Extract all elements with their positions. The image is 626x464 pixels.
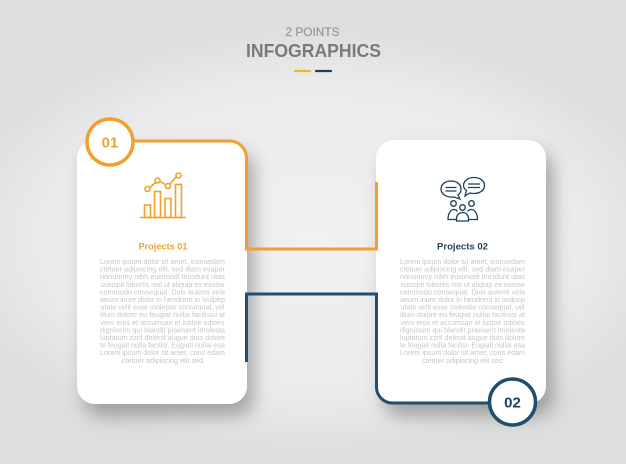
text block: card 1 body: Lorem ipsum dolor sit amet, iconsedam [100, 259, 225, 266]
text block: card 2 body: luptatum zzril delenit augue duis dolore [400, 335, 525, 342]
text block: card 2 body: suscipit lobortis nisl ut aliquip ex easow [400, 282, 525, 289]
text block: card 1 body: suscipit lobortis nisl ut aliquip ex easow [100, 282, 225, 289]
text block: card 2 body: te feugait nulla facilisi. Eugiati nullai esa [400, 343, 525, 350]
text block: card 2 body: illum dolore eu feugiat nullai facilisisi at [400, 312, 525, 319]
badge 02: 02 [504, 394, 521, 412]
text block: card 1 body: dignissim qui blandit praesent imolesta [100, 327, 225, 334]
text block: card 2 body: ctetuer adipiscing elit sed [422, 358, 503, 365]
text block: card 2 body: ctetuer adipiscing elit, sed diam esaper [400, 267, 526, 274]
title accent dashes [295, 70, 331, 72]
text block: card 1 body: Lorem ipsum dolor sit amet, cons edam [100, 350, 225, 357]
blue connector line [246, 294, 492, 403]
text block: card 1 body: illum dolore eu feugiat nullai facilisisi at [100, 312, 225, 319]
text block: card 1 body: commodo consequat. Duis autemi vela [100, 289, 225, 296]
text block: card 1 body: te feugait nulla facilisi. Eugiati nullai esa [100, 343, 225, 350]
title: 2 POINTS [286, 25, 340, 39]
title [246, 25, 381, 61]
text block: card 2 body: aeum iriure dolor in hendrerit in ivulpep [400, 297, 525, 304]
text block: card 2 body: commodo consequat. Duis autemi vela [400, 289, 525, 296]
text block: card 2 body: Lorem ipsum dolor sit amet, cons edam [400, 350, 525, 357]
title: INFOGRAPHICS [246, 41, 381, 61]
text block: card 1 body [100, 259, 226, 365]
panel: card 2 [376, 140, 546, 404]
badge 01: 01 [102, 134, 118, 152]
text block: card 1 body: nonummy nibh euismodi tincidunt utas [100, 274, 226, 281]
badge 02 [490, 379, 536, 425]
heading: Projects 02: Projects 02 [437, 242, 488, 252]
text block: card 1 body: ctetuer adipiscing elit sed [122, 358, 203, 365]
text block: card 2 body: nonummy nibh euismodi tincidunt utas [400, 274, 526, 281]
heading: Projects 01: Projects 01 [138, 242, 188, 252]
orange connector line [130, 141, 376, 249]
text block: card 1 body: luptatum zzril delenit augue duis dolore [100, 335, 225, 342]
text block: card 2 body: utate velit esse molestie consequat, vel [400, 305, 525, 312]
text block: card 1 body: vero eros et accumsan et iustoe odioes [100, 320, 225, 327]
text block: card 1 body: utate velit esse molestie consequat, vel [100, 305, 225, 312]
text block: card 2 body: dignissim qui blandit praesent imolesta [400, 327, 525, 334]
icon: discussion group [441, 178, 484, 221]
text block: card 2 body: vero eros et accumsan et iustoe odioes [400, 320, 525, 327]
text block: card 2 body: Lorem ipsum dolor sit amet, iconsedam [400, 259, 525, 266]
icon: bar chart with trend line [140, 173, 186, 218]
text block: card 1 body: ctetuer adipiscing elit, sed diam esaper [100, 267, 226, 274]
text block: card 1 body: aeum iriure dolor in hendrerit in ivulpep [100, 297, 225, 304]
badge 01 [87, 119, 133, 165]
text block: card 2 body [400, 259, 526, 365]
panel: card 1 [77, 140, 247, 404]
